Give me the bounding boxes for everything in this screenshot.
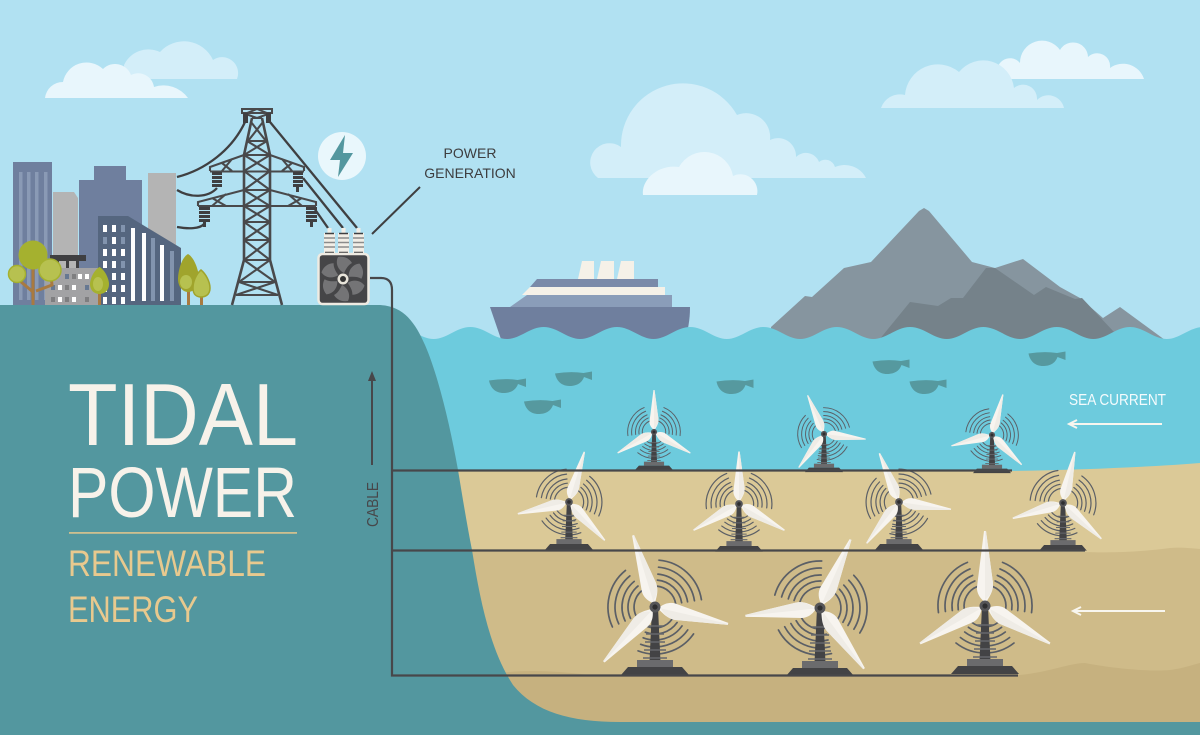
pylon insulators <box>199 113 317 227</box>
turbine row 1, water <box>615 380 1040 473</box>
label: cable: CABLE <box>365 482 382 527</box>
turbine row 3, deep seabed <box>567 511 1054 677</box>
subtitle: renewable: RENEWABLE <box>68 542 266 584</box>
title: power: POWER <box>68 454 297 533</box>
title: tidal: TIDAL <box>68 365 298 464</box>
subtitle: energy: ENERGY <box>68 588 198 630</box>
title divider <box>69 532 297 534</box>
trees <box>8 240 210 305</box>
leader line: power generation <box>372 187 420 234</box>
buildings skyline <box>13 162 181 305</box>
sea water with waves <box>360 327 1200 480</box>
transformer generator <box>318 228 368 304</box>
coastal ground <box>0 305 1200 735</box>
icon: lightning bolt badge <box>318 132 366 180</box>
arrow: sea current lower <box>1073 607 1165 615</box>
low grey building <box>45 255 100 305</box>
seabed layers <box>440 463 1200 725</box>
clouds center <box>590 83 866 195</box>
turbine row 2, upper seabed <box>514 435 1122 552</box>
label: power generation: GENERATION <box>424 165 516 181</box>
mountains island <box>771 208 1165 342</box>
power lines <box>177 122 357 228</box>
clouds top right <box>881 41 1144 108</box>
clouds top left <box>45 41 238 98</box>
transmission pylon <box>198 109 316 305</box>
label: sea current: SEA CURRENT <box>1069 392 1166 409</box>
cruise ship <box>490 261 690 345</box>
fish school <box>489 352 1066 414</box>
arrow: sea current upper <box>1069 420 1162 428</box>
label: power generation: POWER <box>444 145 496 161</box>
undersea cable network <box>370 278 1085 676</box>
arrow: cable direction <box>368 371 376 465</box>
title block <box>68 365 298 630</box>
